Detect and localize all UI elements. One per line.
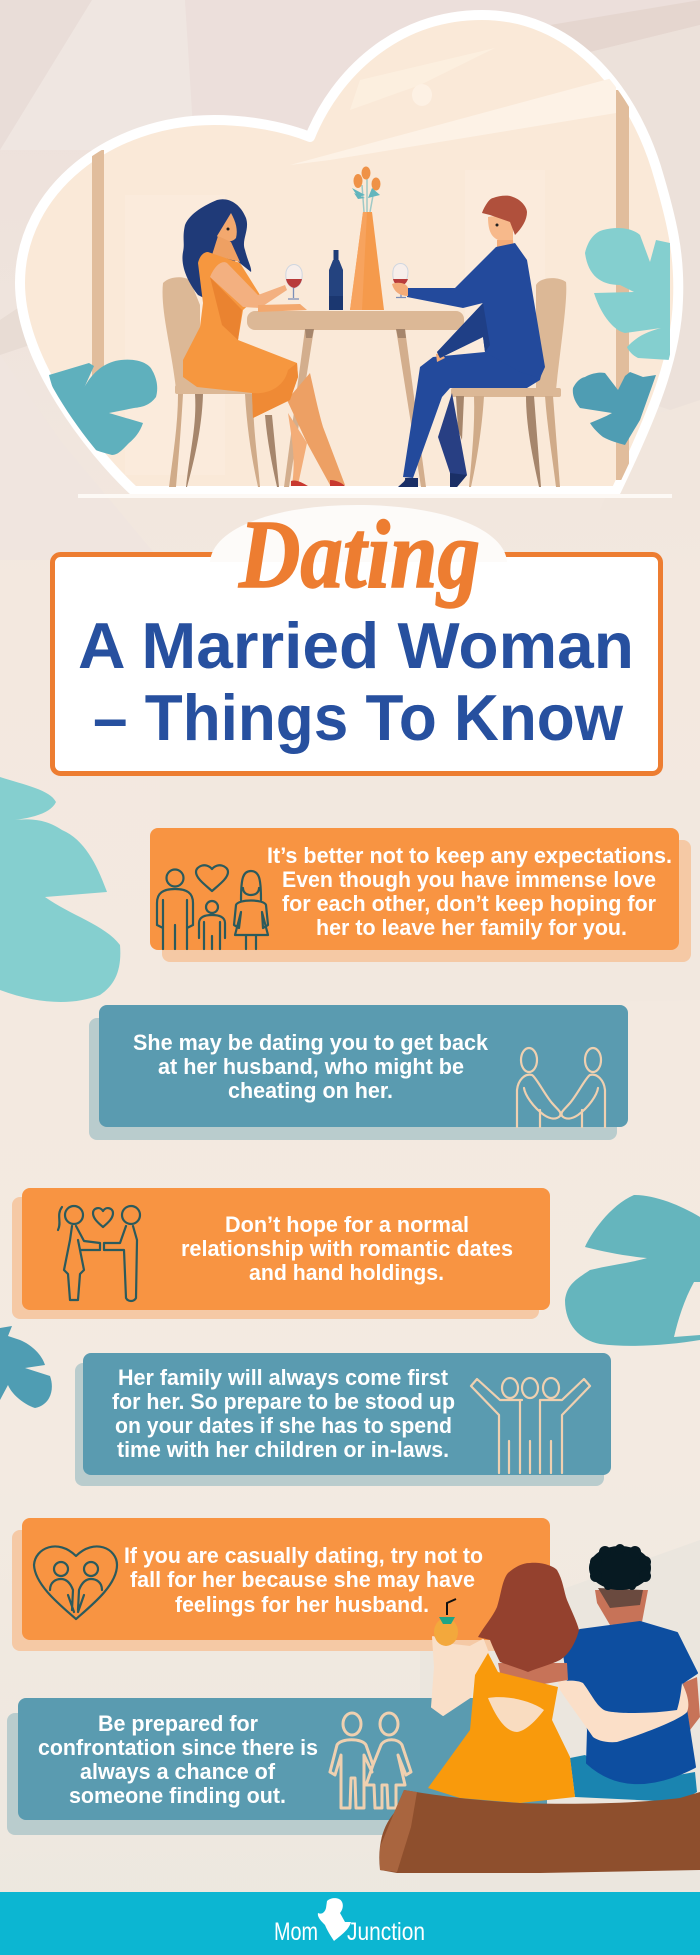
icon: couple holding hands [517,1048,605,1127]
card 1 text: her to leave her family for you. [316,915,627,940]
man's arm around woman [558,1681,688,1742]
card 2 text: She may be dating you to get back [133,1030,489,1055]
footer logo [274,1898,425,1946]
illustration: couple sitting on log [379,1544,700,1873]
illustration: couple on a date inside heart [20,15,678,491]
icon: couple in heart [34,1546,117,1619]
man's neck and head [595,1590,648,1625]
heart frame [20,15,678,491]
man's skin arm [683,1677,700,1730]
heading: A Married Woman: A Married Woman [78,609,634,682]
wine glass [393,264,408,286]
icon: mother silhouette [318,1898,351,1941]
woman's arm and drink [432,1637,488,1715]
card 6 text [38,1711,318,1808]
heading: Things To Know: – Things To Know [93,681,623,754]
card 5 text: If you are casually dating, try not to [124,1543,483,1568]
icon: group with raised arms [471,1378,590,1473]
card 2: get back at husband [89,1005,628,1140]
footer logo: Mom [274,1918,318,1946]
card 4 text: Her family will always come first [118,1365,449,1390]
title panel [52,501,660,774]
footer band [0,1892,700,1955]
card 2 text: at her husband, who might be [158,1054,464,1079]
card 4 text: for her. So prepare to be stood up [112,1389,455,1414]
leaf: right lower teal [573,372,656,445]
icon: family [157,865,268,949]
table [247,311,464,487]
card 6 text: Be prepared for [98,1711,258,1736]
footer logo: Junction [347,1918,425,1946]
chair: left [163,277,279,487]
card 5: casual dating [12,1518,550,1651]
heading: Dating: Dating [238,501,480,609]
icon: couple with heart [58,1206,140,1301]
card 6 text: confrontation since there is [38,1735,318,1760]
man [392,196,545,487]
card 3 text [181,1212,513,1285]
card 1 text [267,843,672,940]
leaf: left teal [49,360,157,455]
leaf: big left aqua [0,777,120,1002]
man's jeans [570,1755,697,1802]
card 5 text: feelings for her husband. [175,1592,429,1617]
card 1 text: for each other, don’t keep hoping for [282,891,656,916]
card 4 text: on your dates if she has to spend [115,1413,452,1438]
leaf: right light teal [585,228,670,360]
man's shirt [563,1622,697,1783]
woman's hair [478,1563,579,1672]
leaf: big right teal [565,1195,700,1346]
wine glass [286,264,302,288]
leg skin [287,373,345,485]
card 3 text: and hand holdings. [249,1260,444,1285]
card 6: confrontation [7,1698,547,1835]
card 1 text: Even though you have immense love [282,867,656,892]
card 4 text [112,1365,455,1462]
card 6 text: always a chance of [80,1759,276,1784]
floor line [78,494,672,498]
room interior [49,48,670,487]
card 5 text [124,1543,483,1617]
card 6 text: someone finding out. [69,1783,286,1808]
card 4 text: time with her children or in-laws. [117,1437,449,1462]
card 5 text: fall for her because she may have [130,1567,475,1592]
card 4: family comes first [75,1353,611,1486]
flower vase [350,166,384,310]
icon: couple standing [330,1713,411,1808]
card 2 text: cheating on her. [228,1078,393,1103]
card 1: expectations [150,828,691,962]
card 3: no normal relationship [12,1188,550,1319]
log [379,1790,700,1873]
card 1 text: It’s better not to keep any expectations. [267,843,672,868]
card 3 text: Don’t hope for a normal [225,1212,469,1237]
man's hair [589,1544,651,1590]
woman's back [498,1663,568,1688]
chair: right [451,278,566,487]
leaf: small left teal [0,1326,52,1408]
wine bottle [329,250,343,310]
card 2 text [133,1030,489,1103]
woman's dress [428,1653,575,1803]
title bump [210,505,507,562]
card 3 text: relationship with romantic dates [181,1236,513,1261]
woman [182,199,345,486]
